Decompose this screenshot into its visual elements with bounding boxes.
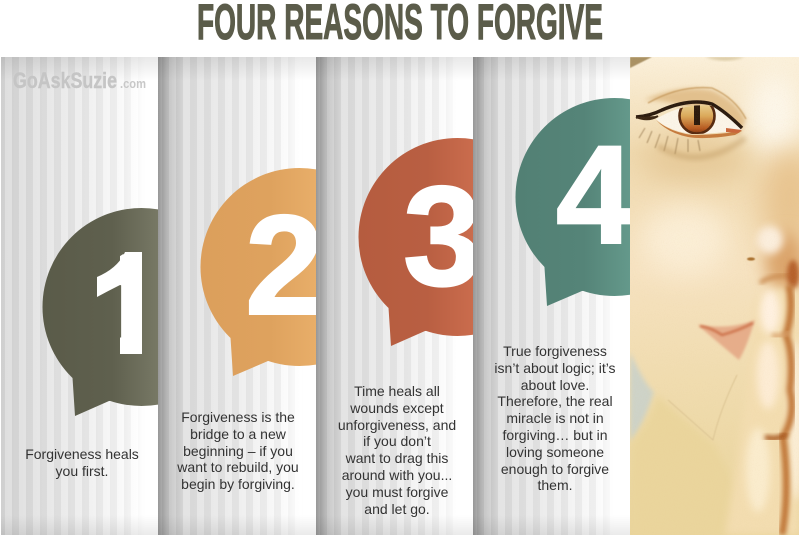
text: reason 3: wounds except — [349, 400, 444, 416]
text: reason 4: isn’t about logic; it’s — [494, 360, 616, 376]
text: reason 1: you first. — [56, 463, 108, 479]
text: reason 4: enough to forgive — [501, 461, 609, 477]
text: reason 4: them. — [537, 477, 573, 493]
fingers — [725, 285, 800, 535]
text: reason 3: want to drag this — [345, 450, 448, 466]
photo: woman's face with praying hands — [630, 57, 800, 535]
number 1 — [97, 252, 142, 354]
lips — [698, 320, 755, 360]
watermark — [14, 72, 146, 88]
text: reason 4: miracle is not in — [506, 410, 604, 426]
speech bubble 3 — [358, 138, 473, 346]
text: reason 3: Time heals all — [354, 383, 440, 399]
eye — [636, 88, 746, 157]
text: reason 2: beginning – if you — [183, 443, 293, 459]
number 3: 3 — [403, 157, 482, 316]
speech bubble 4 — [516, 98, 630, 306]
number 1: 1 — [89, 225, 168, 384]
text: reason 1: Forgiveness heals — [25, 446, 139, 462]
panel: reason 1 — [1, 57, 158, 535]
text: reason 4: forgiving… but in — [502, 427, 608, 443]
neck and jaw — [632, 400, 717, 466]
text: reason 4: loving someone — [506, 444, 604, 460]
text: reason 3: and let go. — [364, 501, 430, 517]
text: reason 4: about love. — [521, 377, 589, 393]
speech bubble 1 — [42, 208, 158, 416]
text: reason 2: bridge to a new — [190, 426, 287, 442]
text: reason 2: want to rebuild, you — [176, 459, 299, 475]
number 4: 4 — [556, 116, 634, 273]
nose — [747, 226, 800, 292]
watermark: .com — [120, 76, 146, 91]
panel: reason 3 — [316, 57, 473, 535]
panel: reason 4 — [473, 57, 630, 535]
text: reason 2: Forgiveness is the — [181, 409, 295, 425]
text: reason 4: Therefore, the real — [497, 393, 613, 409]
panel: reason 2 — [158, 57, 316, 535]
text: reason 3: around with you... — [342, 467, 452, 483]
text: reason 2: begin by forgiving. — [181, 476, 295, 492]
text: reason 4: True forgiveness — [503, 343, 607, 359]
text: reason 3: if you don’t — [363, 433, 431, 449]
speech bubble 2 — [200, 168, 316, 376]
text: reason 3: unforgiveness, and — [338, 417, 456, 433]
watermark: GoAskSuzie — [13, 68, 117, 93]
grey background gap — [630, 352, 654, 442]
number 2: 2 — [245, 186, 324, 345]
text: reason 3: you must forgive — [346, 484, 449, 500]
